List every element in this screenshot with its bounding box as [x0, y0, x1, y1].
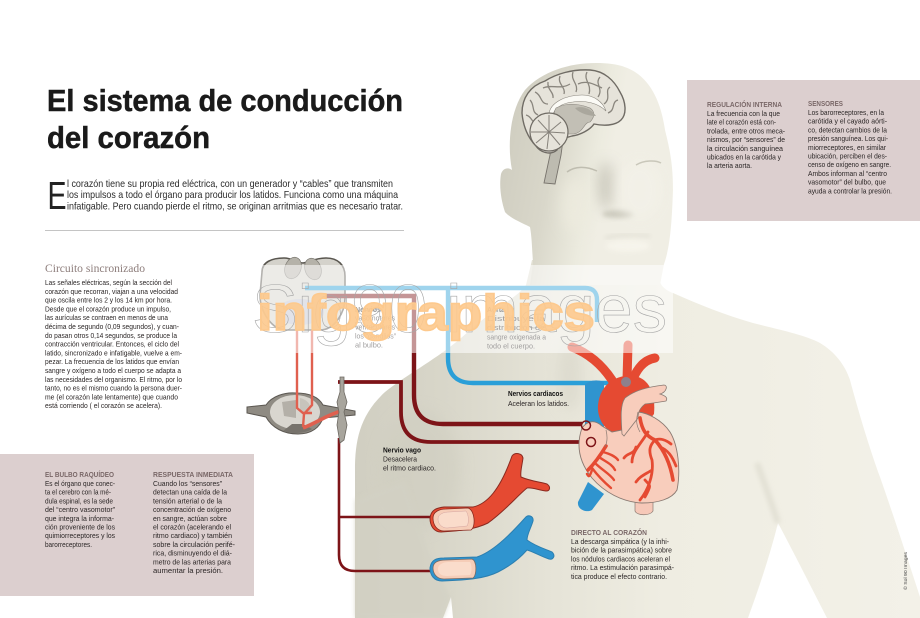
- text: respuesta inmediata: [153, 470, 236, 575]
- text: el bulbo raquídeo: que integra la informa-: [45, 514, 114, 523]
- watermark orange text: infographics: [257, 285, 595, 341]
- text: sensores: censo de oxígeno en sangre.: [808, 160, 891, 169]
- panel: regulación interna and sensores: [687, 80, 920, 221]
- text: regulación interna: [707, 100, 785, 170]
- text: respuesta inmediata: tensión arterial o de la: [153, 496, 223, 505]
- text block: Circuito sincronizado: sangre y oxígeno a todo el cuerpo se adapta a: [45, 366, 182, 375]
- text: el bulbo raquídeo: [45, 470, 116, 549]
- text block: Circuito sincronizado: tanto, no es el mismo cuando la persona duer-: [45, 384, 182, 393]
- text block: Circuito sincronizado: las necesidades del organismo. El ritmo, por lo: [45, 375, 182, 384]
- text block: Circuito sincronizado: [45, 263, 182, 410]
- label: aorta: [487, 305, 547, 350]
- text: respuesta inmediata: metro de las arterias para: [153, 557, 232, 566]
- text block: Circuito sincronizado: contracción ventricular. Entonces, el ciclo del: [45, 340, 179, 349]
- text: respuesta inmediata: Cuando los “sensores”: [153, 479, 222, 488]
- vein vessel: [430, 516, 554, 581]
- label: aorta: sangre oxigenada a: [487, 332, 547, 342]
- text: el bulbo raquídeo: quimiorreceptores y los: [45, 531, 115, 540]
- intro paragraph: los impulsos a todo el órgano para producir los latidos. Funciona como una máquina: [67, 190, 398, 201]
- text block: directo al corazón: La descarga simpática (y la inhi-: [571, 537, 669, 546]
- face and body shading: [355, 160, 778, 618]
- image credit: © Sol 90 Images: [902, 551, 909, 590]
- text: sensores: presión sanguínea. Los qui-: [808, 134, 888, 143]
- ventricle detail: [605, 412, 640, 447]
- text: respuesta inmediata: concentración de oxígeno: [153, 505, 231, 514]
- text block: Circuito sincronizado: pezar. La frecuencia de los latidos que envían: [45, 357, 179, 366]
- text: respuesta inmediata: el corazón (acelerando el: [153, 522, 231, 532]
- text block: Circuito sincronizado: Desde que el corazón produce un impulso,: [45, 304, 171, 313]
- text: sensores: SENSORES: [808, 99, 843, 108]
- text: sensores: carótida y el cayado aórti-: [808, 117, 888, 126]
- text: respuesta inmediata: rica, disminuyendo el diá-: [153, 549, 232, 558]
- blue nerve lines: [305, 288, 625, 383]
- label: nervios cardiacos: Nervios cardiacos: [508, 389, 563, 398]
- heart: [572, 345, 679, 515]
- label: nervio vago: Desacelera: [383, 454, 418, 464]
- text: sensores: vasomotor” del bulbo, que: [808, 178, 886, 187]
- text block: Circuito sincronizado: las aurículas se contraen en menos de una: [45, 313, 169, 322]
- descending aorta: [635, 498, 653, 515]
- label: aorta: distribución de: [487, 323, 545, 332]
- text: el bulbo raquídeo: dula espinal, es la sede: [45, 496, 113, 505]
- label: nervios: al bulbo.: [355, 340, 383, 350]
- label: nervio vago: [383, 446, 436, 472]
- aortic arch and branches: [572, 345, 655, 434]
- watermark band: [250, 265, 673, 353]
- label: nervio vago: el ritmo cardiaco.: [383, 464, 436, 472]
- text: sensores: Ambos informan al “centro: [808, 169, 887, 178]
- text block: directo al corazón: los nódulos cardiacos aceleran el: [571, 554, 670, 563]
- artery vessel: [430, 454, 550, 532]
- text: respuesta inmediata: detectan una caída de la: [153, 488, 228, 497]
- text: respuesta inmediata: RESPUESTA INMEDIATA: [153, 470, 233, 479]
- text block: Circuito sincronizado: me (el corazón late lentamente) que cuando: [45, 392, 178, 401]
- text: sensores: miorreceptores, en similar: [808, 143, 886, 152]
- text block: directo al corazón: tica produce el efecto contrario.: [571, 572, 667, 581]
- vena cava: [578, 380, 604, 511]
- title: del corazón: [47, 120, 210, 155]
- spinal cord section: [247, 393, 355, 434]
- intro paragraph: infatigable. Pero cuando pierde el ritmo, se originan arritmias que es necesario tratar.: [67, 202, 403, 212]
- text: el bulbo raquídeo: EL BULBO RAQUÍDEO: [45, 470, 114, 479]
- sympathetic tracts: [297, 330, 341, 428]
- label: nervios cardiacos: [508, 389, 569, 408]
- text: respuesta inmediata: en sangre, actúan sobre: [153, 514, 227, 523]
- label: nervios: [355, 305, 396, 350]
- label: aorta: Distribuye la: [487, 314, 546, 323]
- title: El sistema de conducción: [47, 83, 403, 118]
- intro paragraph: [48, 175, 403, 218]
- label: nervios: Nervios: [355, 305, 381, 314]
- coronary arteries: [587, 418, 676, 500]
- text: respuesta inmediata: aumentar la presión.: [153, 566, 223, 575]
- dark red nerve lines: [325, 296, 587, 571]
- text: respuesta inmediata: ritmo cardiaco) y también: [153, 531, 232, 540]
- text block: directo al corazón: DIRECTO AL CORAZÓN: [571, 528, 647, 537]
- text block: Circuito sincronizado: que oscila entre los 2 y los 14 km por hora.: [45, 296, 172, 305]
- text: sensores: ayuda a controlar la presión.: [808, 186, 892, 195]
- label: aorta: todo el cuerpo.: [487, 342, 535, 350]
- title: [47, 83, 403, 155]
- label: nervios: los “ganglios”: [355, 332, 396, 340]
- text block: Circuito sincronizado: Las señales eléctricas, según la sección del: [45, 278, 172, 287]
- label: nervio vago: Nervio vago: [383, 446, 421, 454]
- medulla section: [260, 255, 345, 330]
- label: nervios: vasomotores: [355, 314, 395, 322]
- text: regulación interna: nismos, por “sensores” de: [707, 135, 785, 144]
- label: aorta: Aorta: [487, 305, 506, 314]
- text: el bulbo raquídeo: ta el cerebro con la mé-: [45, 488, 111, 497]
- panel: bulbo raquídeo and respuesta inmediata: [0, 454, 254, 596]
- text: sensores: ubicación, perciben el des-: [808, 152, 887, 160]
- ventricles: [579, 412, 679, 503]
- text: regulación interna: REGULACIÓN INTERNA: [707, 100, 782, 109]
- text block: Circuito sincronizado: décima de segundo (0,09 segundos), y cuan-: [45, 322, 179, 331]
- text block: directo al corazón: bición de la parasimpática) sobre: [571, 546, 672, 555]
- text: regulación interna: La frecuencia con la que: [707, 109, 780, 118]
- text block: directo al corazón: [571, 528, 674, 581]
- text block: Circuito sincronizado: está corriendo ( el corazón se acelera).: [45, 401, 162, 410]
- pulmonary artery: [621, 385, 667, 436]
- text: sensores: co, detectan cambios de la: [808, 125, 888, 134]
- text: sensores: [808, 99, 892, 195]
- text: el bulbo raquídeo: ción proveniente de los: [45, 522, 115, 532]
- text: regulación interna: la arteria aorta.: [707, 161, 752, 170]
- text block: Circuito sincronizado: latido, sincronizado e infatigable, vuelve a em-: [45, 348, 182, 357]
- text: regulación interna: la circulación sanguínea: [707, 144, 784, 153]
- text block: Circuito sincronizado: Circuito sincronizado: [45, 263, 145, 275]
- text: el bulbo raquídeo: del “centro vasomotor”: [45, 505, 116, 514]
- text: el bulbo raquídeo: barorreceptores.: [45, 540, 92, 549]
- text block: directo al corazón: ritmo. La estimulación parasimpá-: [571, 563, 674, 572]
- text block: Circuito sincronizado: do pasan otros 0,14 segundos, se produce la: [45, 331, 178, 340]
- intro paragraph: E: [48, 175, 66, 218]
- text: regulación interna: trolada, entre otros meca-: [707, 126, 785, 135]
- text: regulación interna: late el corazón está con-: [707, 118, 776, 127]
- intro paragraph: l corazón tiene su propia red eléctrica, con un generador y “cables” que transmiten: [67, 179, 393, 190]
- label: nervios: ventriculares: [355, 322, 395, 332]
- text: el bulbo raquídeo: Es el órgano que conec-: [45, 479, 115, 488]
- label: nervios cardiacos: Aceleran los latidos.: [508, 399, 569, 408]
- watermark outlined text: Sig90 images: [252, 271, 667, 347]
- ganglion chain: [337, 377, 347, 443]
- brain: [522, 70, 625, 184]
- nerve connection circles: [582, 377, 631, 446]
- text: sensores: Los barorreceptores, en la: [808, 108, 885, 117]
- text: respuesta inmediata: sobre la circulación perifé-: [153, 540, 236, 549]
- text block: Circuito sincronizado: corazón que recorran, viajan a una velocidad: [45, 287, 178, 296]
- text: regulación interna: ubicados en la carótida y: [707, 152, 781, 162]
- human body figure: [355, 63, 920, 618]
